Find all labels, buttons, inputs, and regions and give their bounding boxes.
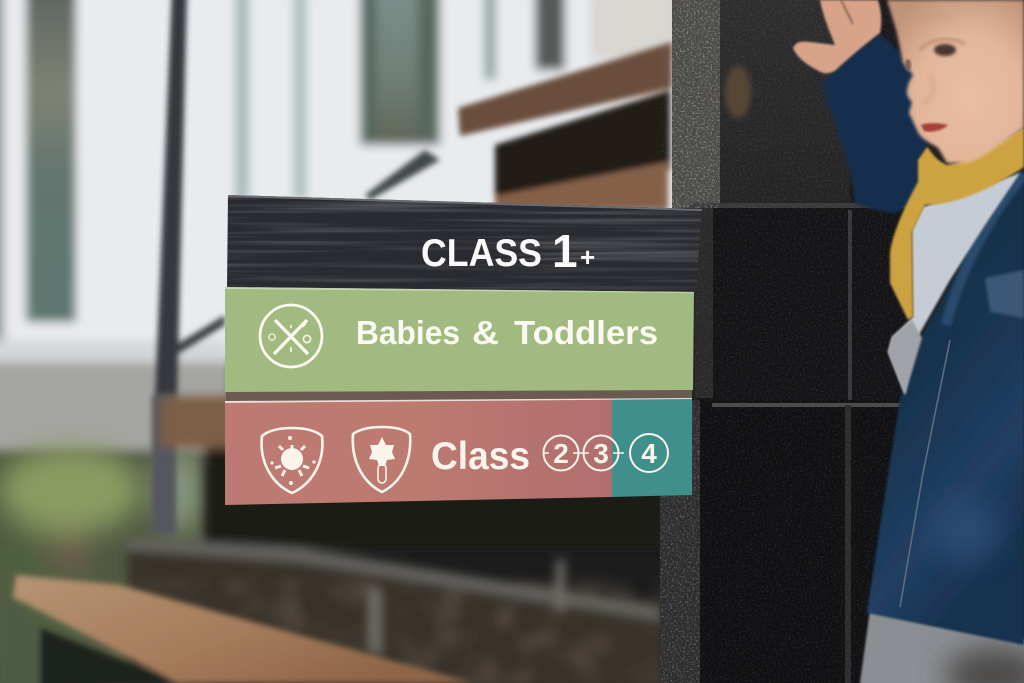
face xyxy=(887,0,1024,163)
label: Babies & Toddlers: & xyxy=(472,314,499,351)
sleeve xyxy=(822,35,927,213)
foreground wooden bench xyxy=(0,575,473,683)
coat body xyxy=(867,173,1024,645)
label: Babies & Toddlers: Babies xyxy=(356,314,460,351)
icon: shield with pacifier xyxy=(353,427,410,492)
sign: red and teal Class board xyxy=(225,398,692,505)
background: upper stairs and railing xyxy=(152,0,672,535)
heading: CLASS 1+ xyxy=(421,225,595,277)
heading: CLASS 1+: CLASS xyxy=(421,232,542,275)
numbered circles 2 3 4: 2 xyxy=(553,438,569,469)
heading: CLASS 1+: 1 xyxy=(552,225,578,277)
numbered circles 2 3 4: 4 xyxy=(641,438,657,469)
hand xyxy=(793,0,881,73)
lips xyxy=(921,123,948,132)
icon: crossed bats in circle xyxy=(260,305,322,367)
nose shadow xyxy=(922,75,934,103)
numbered circles 2 3 4 xyxy=(543,434,668,472)
label: Class: Class xyxy=(431,435,530,478)
background: lower step and stone wall xyxy=(128,396,665,683)
stone pillar xyxy=(660,0,912,683)
sign: CLASS 1+ dark board xyxy=(227,195,702,292)
sign backing strip xyxy=(226,390,692,402)
background: blurred building xyxy=(0,0,690,683)
eye xyxy=(934,44,956,56)
child xyxy=(793,0,1024,683)
grey trousers xyxy=(859,610,1024,683)
sign: green Babies & Toddlers board xyxy=(225,287,694,392)
numbered circles 2 3 4: 3 xyxy=(593,438,609,469)
far eye xyxy=(905,59,911,71)
grey undershirt xyxy=(888,173,1020,395)
heading: CLASS 1+: + xyxy=(580,242,595,272)
icon: shield with splat xyxy=(262,428,322,493)
label: Babies & Toddlers xyxy=(356,314,658,351)
label: Babies & Toddlers: Toddlers xyxy=(514,314,658,351)
background: foliage xyxy=(0,445,202,650)
yellow scarf xyxy=(890,128,1024,320)
coat zipper xyxy=(900,340,950,607)
